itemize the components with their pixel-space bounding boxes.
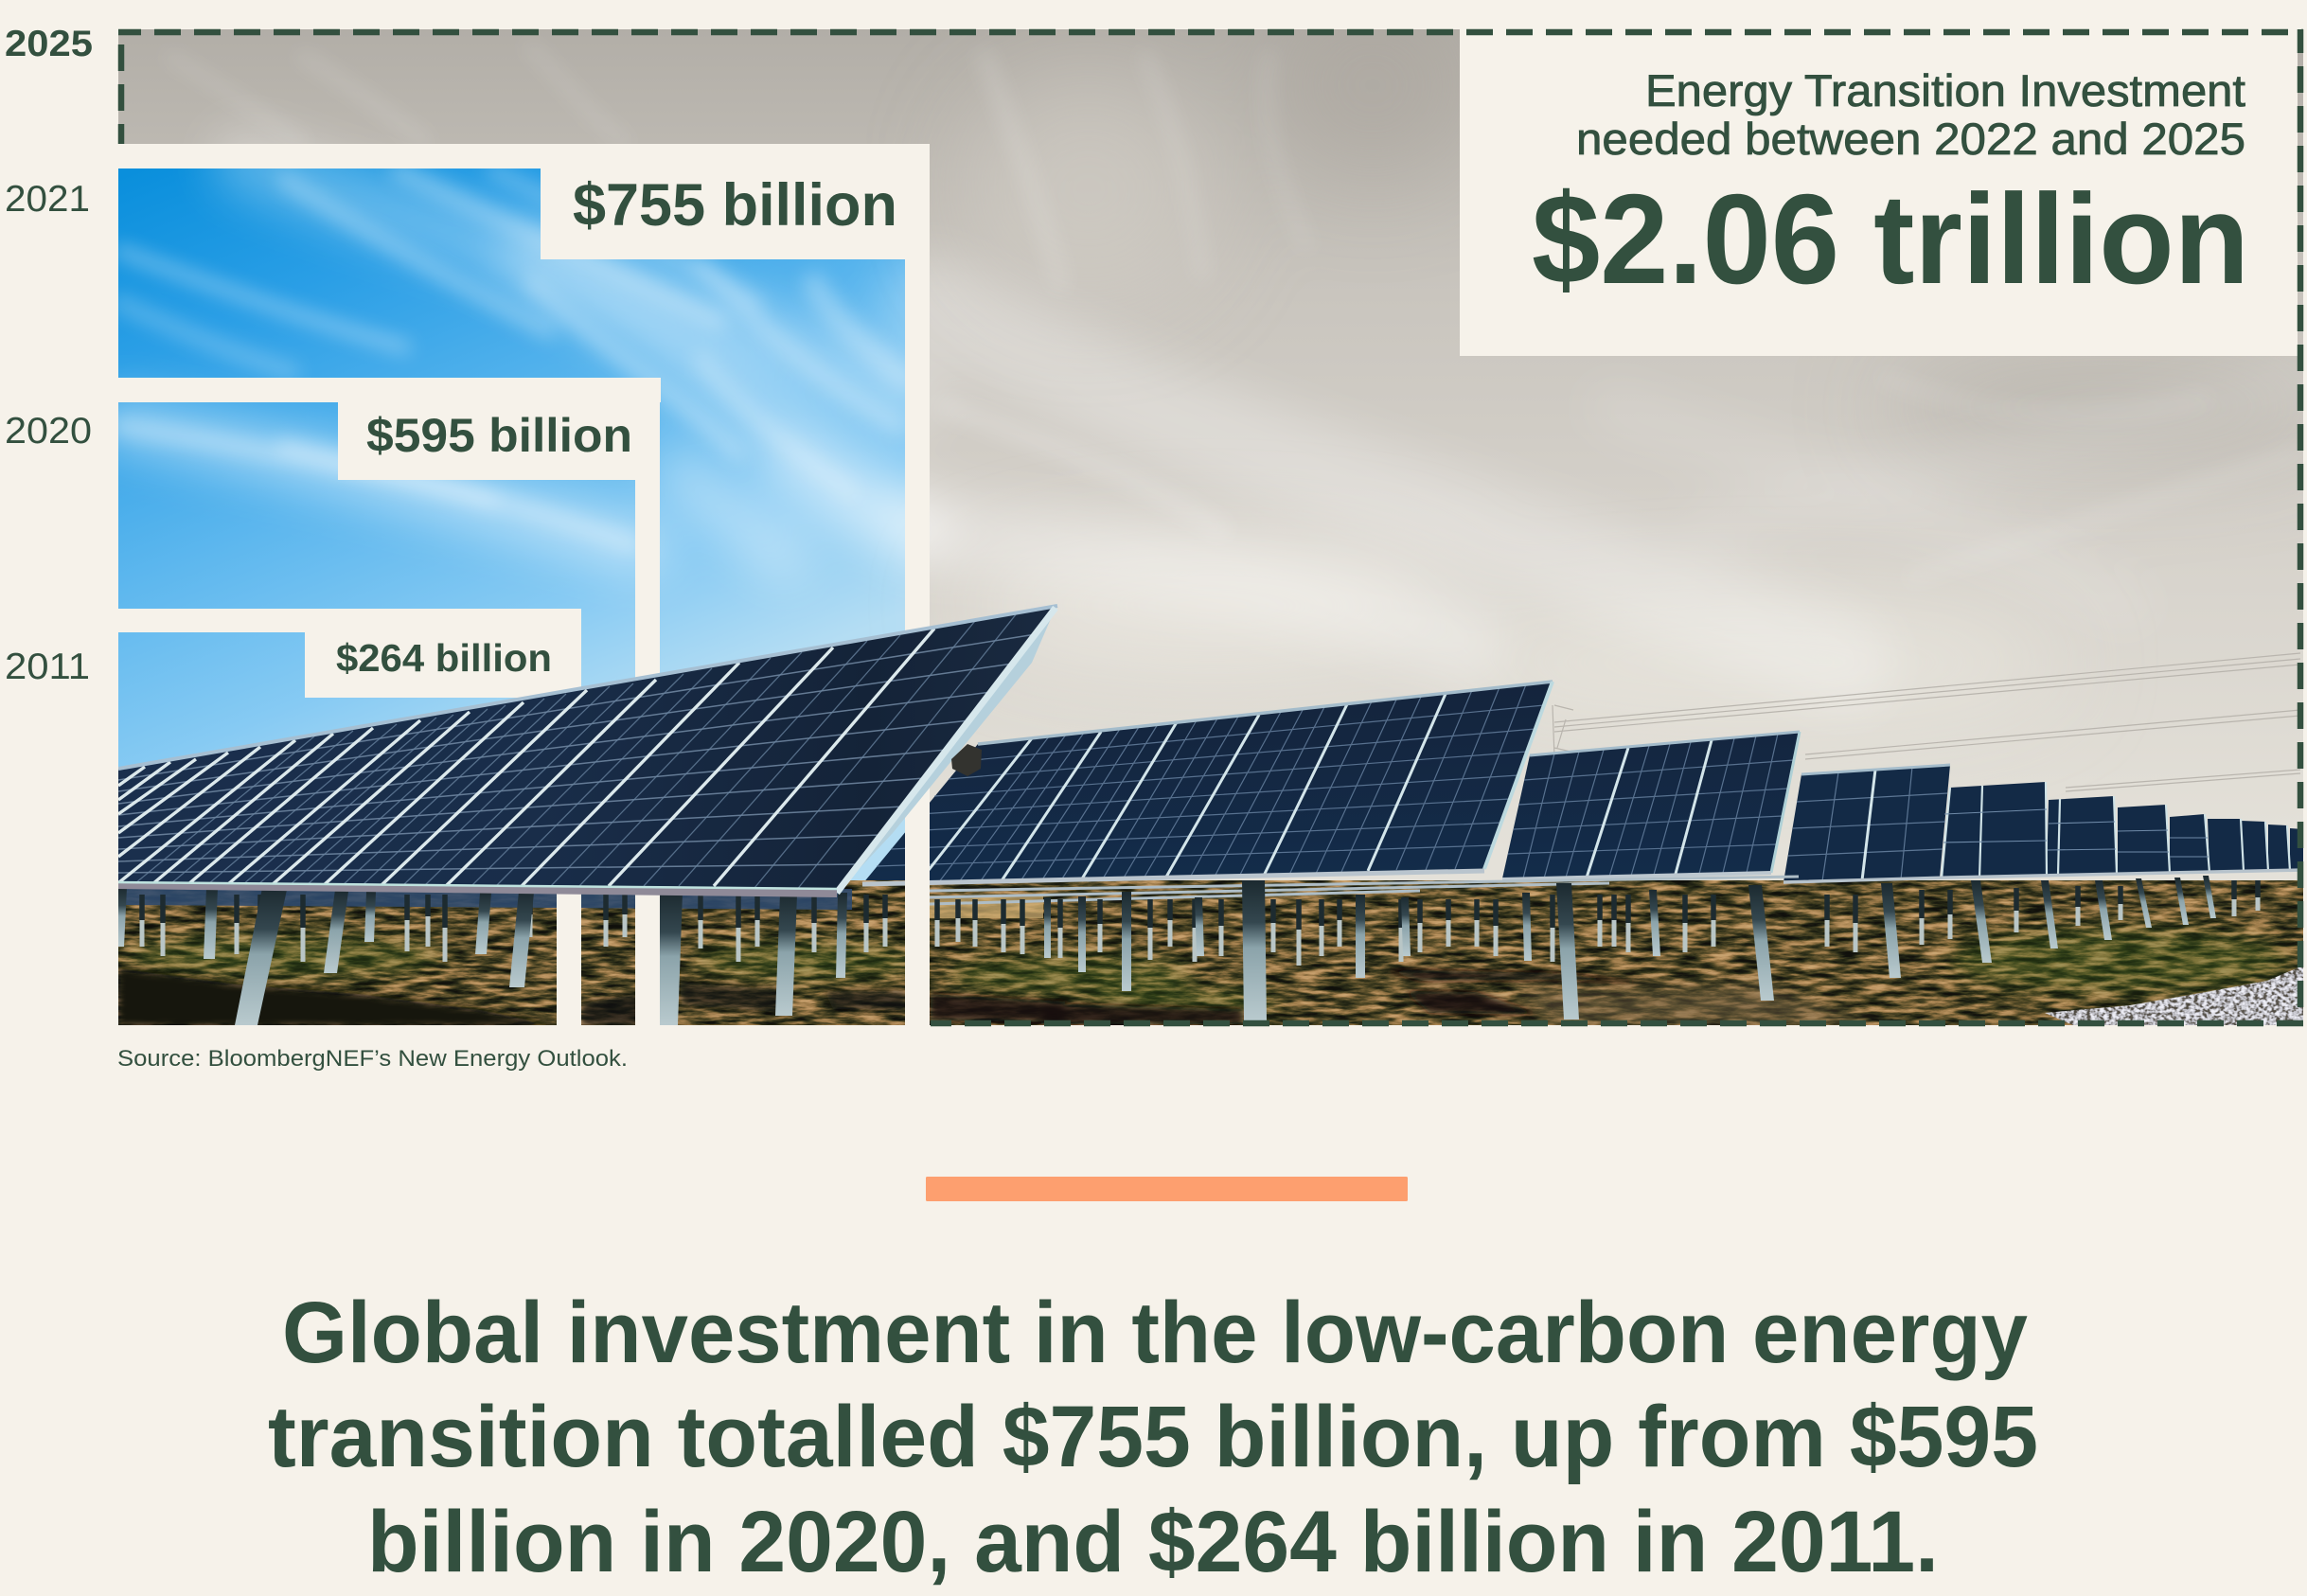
panel cell columns [135,613,1017,891]
year label: 2021: 2021 [5,179,90,220]
back row panels [862,682,2303,884]
year label: 2011: 2011 [5,647,90,687]
sky: blue 2021 area [118,144,930,901]
junction box [951,744,982,776]
panel cell rows [118,634,1036,873]
label box: $595 billion [338,402,636,480]
panel surface [118,606,1057,893]
value label: 2011: $264 billion [336,636,552,680]
gravel [2026,956,2307,1032]
accent bar [926,1177,1408,1201]
label box: $755 billion [541,168,906,259]
value label: 2020: $595 billion [366,409,632,462]
panel row 2 [862,682,1553,884]
callout value: $2.06 trillion [1532,168,2249,310]
far support posts [142,880,2258,966]
panel row 3 [1502,732,1800,878]
main support posts [113,876,2216,1025]
source note: Source: BloombergNEF’s New Energy Outlook. [117,1046,628,1072]
module dividers [118,629,934,886]
bottom rail [118,881,837,897]
shadows on grass [118,968,1744,1026]
far panel rows [1942,782,2303,878]
bars: 2021 frame [118,144,930,1026]
callout text: Energy Transition Investment [1645,65,2245,115]
value label: 2021: $755 billion [573,172,897,239]
horizon [930,896,1043,918]
callout box: 2025 total: needed between 2022 and 2025 [1576,114,2245,164]
headline [268,1285,2038,1590]
green patches [123,929,2291,1019]
back row support rails [118,870,2303,904]
bars: 2020 frame [118,378,661,1026]
headline: Global investment in the low-carbon energy [282,1285,2028,1381]
power lines and pylon [1553,653,2300,791]
panel row 4 [1783,765,1950,882]
ground [118,880,2307,1032]
bars: 2011 frame [118,609,581,1026]
clouds [118,114,2211,683]
year label: 2020: 2020 [5,411,92,452]
dashed outline: 2025 [118,29,2303,1023]
label box: $264 billion [305,632,581,698]
bare soil [1515,984,1884,1025]
sky: desaturated background [118,29,2303,900]
headline: billion in 2020, and $264 billion in 2011. [367,1494,1939,1590]
photo: solar farm with sky, bars cut out [113,0,2307,1032]
panel top edge [118,606,1057,769]
main solar panel [118,606,1057,897]
panel right frame [837,608,1056,893]
callout box: 2025 total [1460,29,2298,356]
gray sky tonal patches [996,80,2301,685]
year label: 2025: 2025 [5,24,93,64]
headline: transition totalled $755 billion, up from $595 [268,1389,2038,1485]
